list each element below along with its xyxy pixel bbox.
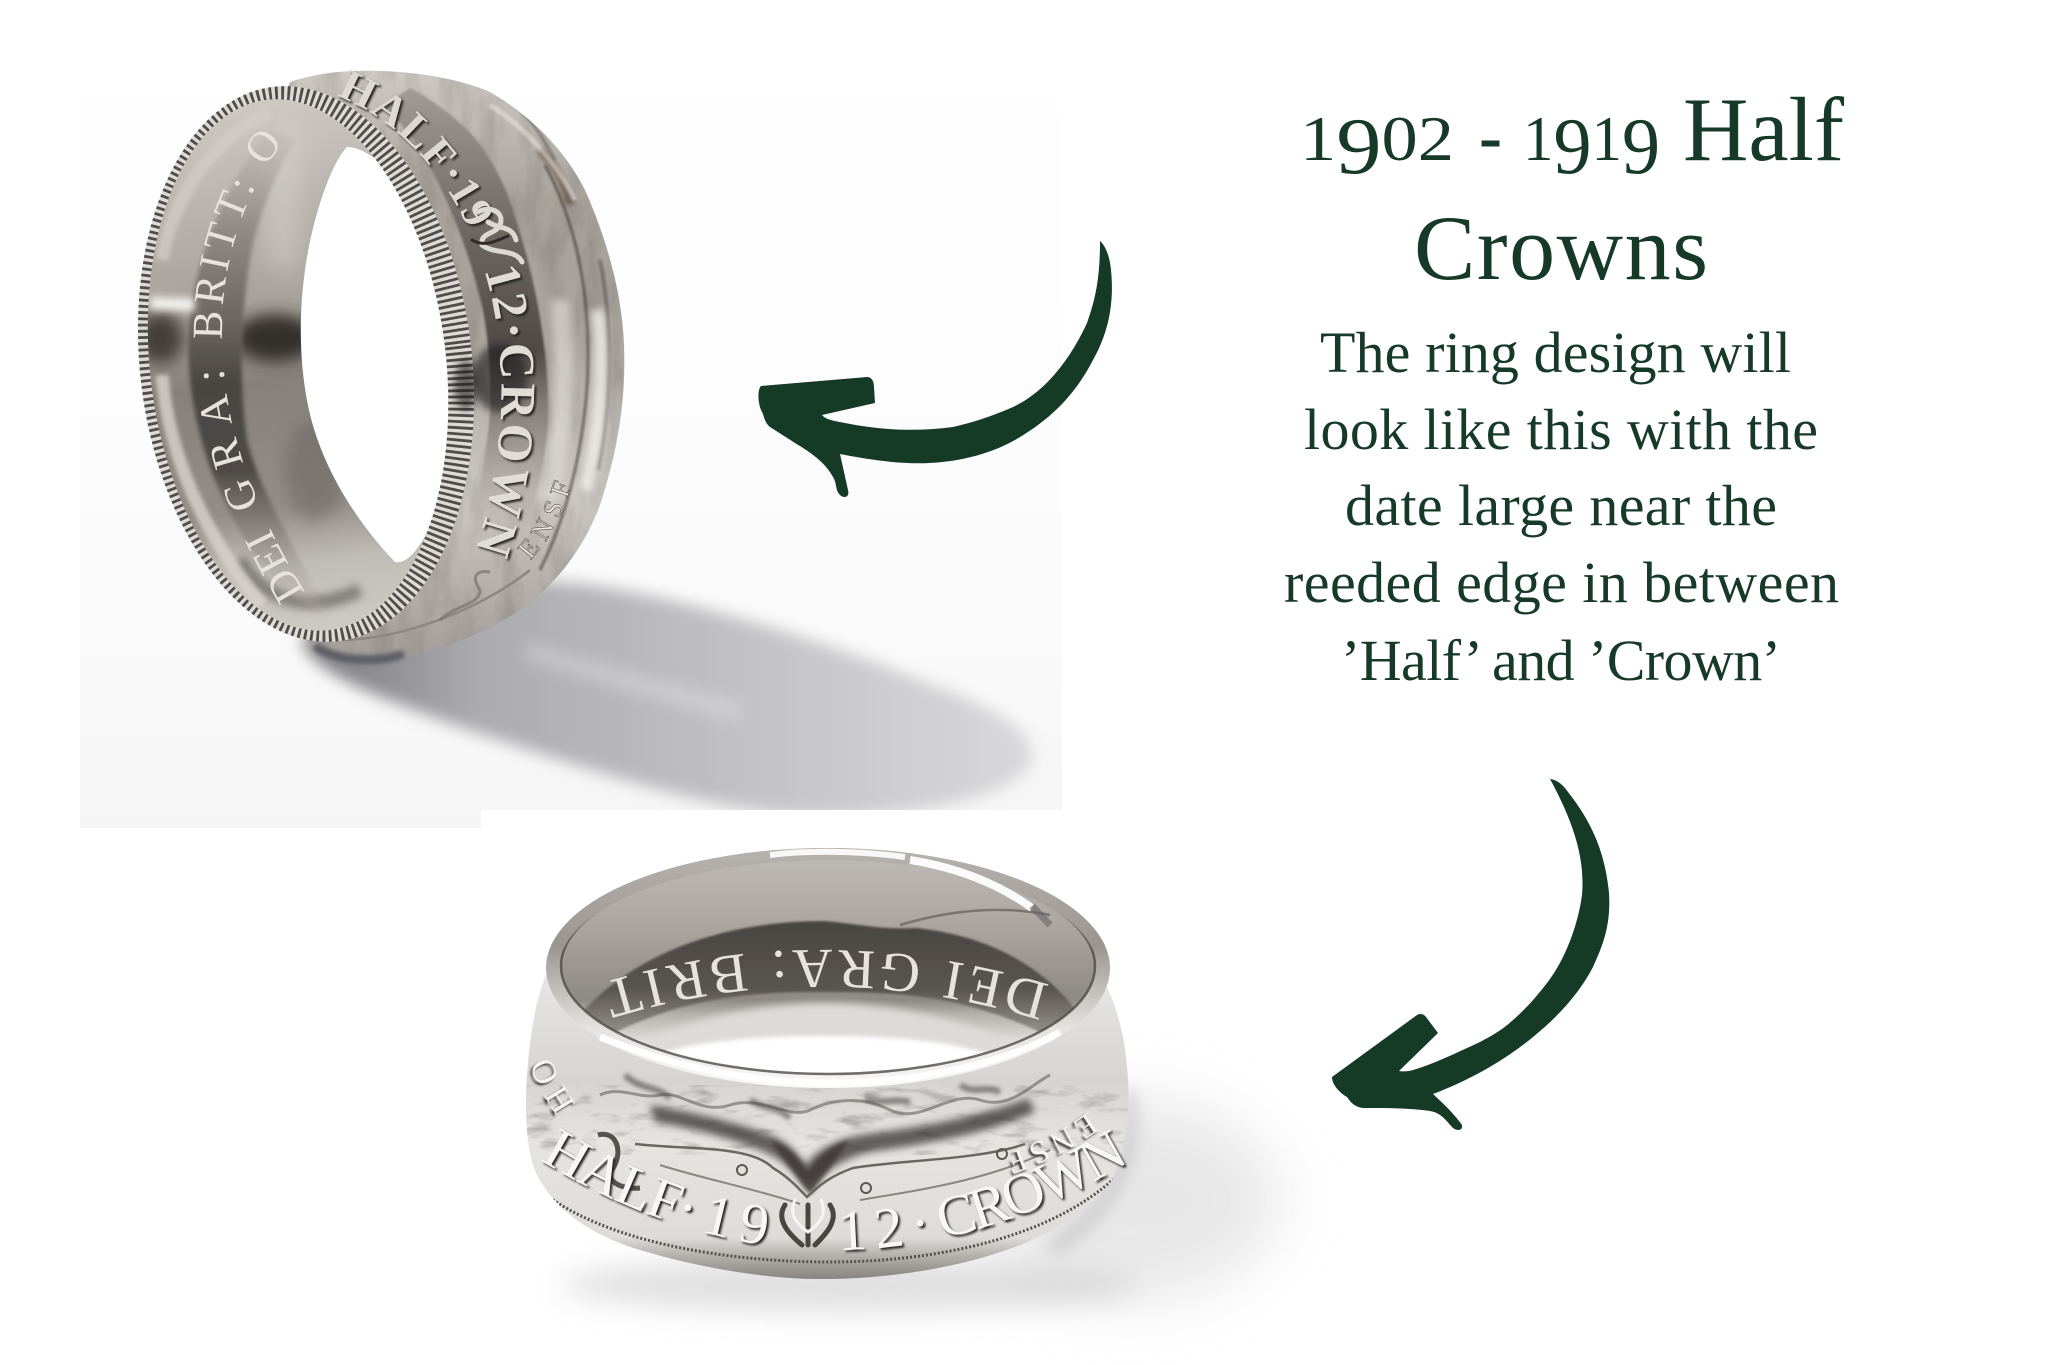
ring photo: standing half crown ring [138, 70, 624, 666]
title: - [1479, 99, 1502, 176]
title: 9 [1622, 103, 1660, 191]
ring body [526, 975, 1128, 1279]
top rim base [546, 848, 1110, 1088]
ring hole [301, 147, 453, 562]
legend band [383, 88, 548, 563]
description text: look like this with the [1304, 397, 1818, 462]
photo background [80, 30, 1062, 828]
ring interior wall [115, 73, 497, 655]
description text: ’Half’ and ’Crown’ [1341, 628, 1781, 693]
contact foot [318, 648, 400, 660]
crown ornament [472, 209, 522, 262]
title: 1 [1300, 103, 1332, 174]
title: 9 [1336, 103, 1382, 191]
legend text: 12 CROWN: 12·CROWN [842, 1129, 1128, 1254]
legend text: HALF 19: HALF·19 [542, 1128, 771, 1247]
ring shadow: top photo [300, 582, 1032, 816]
interior shading [136, 130, 360, 602]
interior inscription: DEI GRA: BRIT [610, 950, 1048, 1020]
dark interior band [575, 921, 1090, 1035]
reeded edge [138, 86, 474, 642]
ring interior [562, 860, 1094, 1073]
title: 1 [1592, 103, 1622, 174]
interior lip highlight [150, 112, 270, 605]
light inner lip [656, 998, 999, 1052]
small side inscription: right: ENSF [1008, 1112, 1099, 1177]
ring outer band [200, 71, 624, 659]
legend dark shading at C [472, 344, 528, 412]
crown ornament [782, 1200, 833, 1245]
arrow: towards bottom ring [1332, 779, 1609, 1130]
ring rim [553, 852, 1103, 1083]
title: Crowns [1414, 197, 1708, 299]
band surface texture [288, 71, 624, 653]
arrow: towards top ring [758, 241, 1112, 497]
description text: reeded edge in between [1284, 550, 1839, 615]
title: 1 [1523, 103, 1555, 174]
description text [1284, 320, 1839, 693]
ring shadow: bottom photo [560, 1090, 1280, 1313]
ring hole [666, 1034, 986, 1073]
small side inscription: left: HO [529, 1060, 575, 1118]
body surface detail [520, 1075, 1140, 1262]
title [1300, 79, 1845, 299]
title: 0 [1382, 103, 1418, 174]
small side inscription: ENSF [516, 480, 570, 560]
title: 9 [1553, 103, 1592, 191]
description text: The ring design will [1320, 320, 1791, 385]
ring photo: lying half crown ring [526, 848, 1128, 1279]
inscription band [188, 130, 325, 615]
title: 2 [1418, 103, 1450, 174]
legend text: HALF 19: HALF·19 [338, 70, 494, 228]
legend text: 12 CROWN: 12·CROWN [477, 266, 538, 562]
description text: date large near the [1345, 473, 1777, 538]
dark smudge on reeded edge [454, 359, 478, 411]
title: Half [1683, 79, 1845, 180]
